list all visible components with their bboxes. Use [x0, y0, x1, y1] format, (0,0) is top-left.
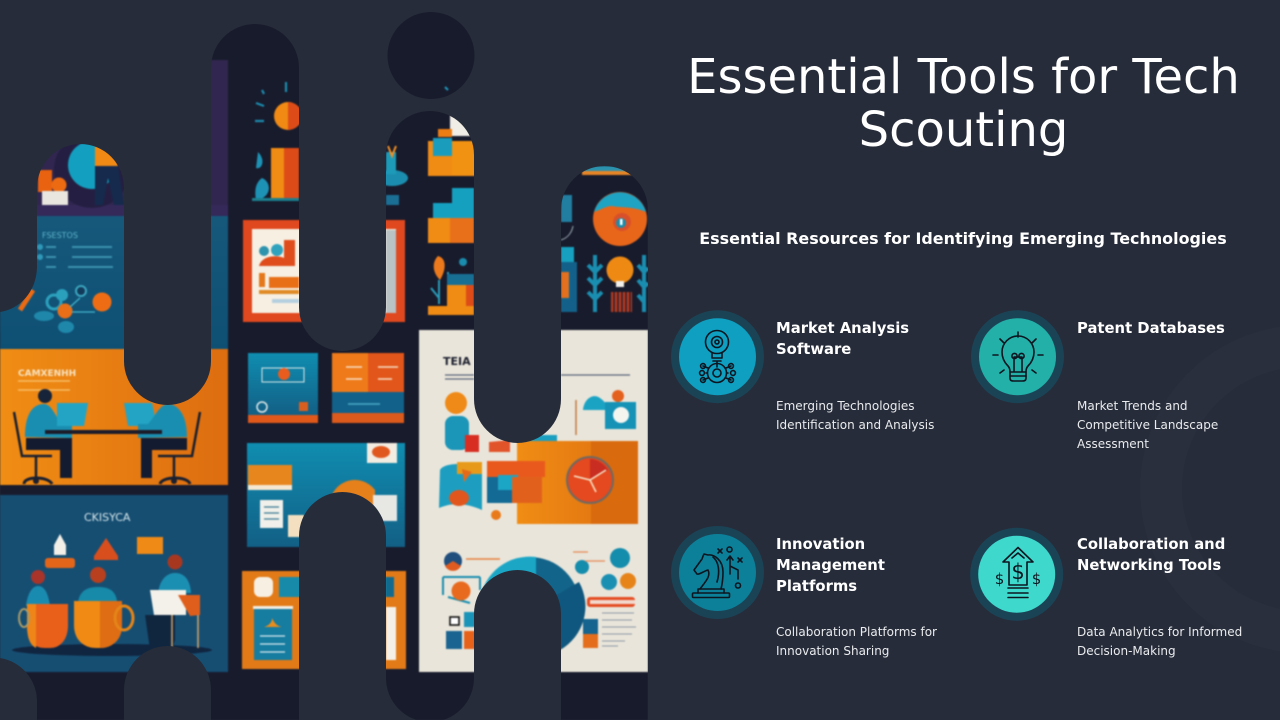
- card: collaboration and networking tools: [970, 528, 1242, 658]
- panel: orange laptop meeting: [0, 349, 228, 485]
- heading: Networking Tools: [1077, 557, 1221, 574]
- decorative ring: [1161, 346, 1280, 632]
- heading: Innovation: [776, 536, 865, 553]
- card: patent databases: [971, 310, 1225, 451]
- icon: dollar arrow: [970, 528, 1063, 621]
- panel: blue network scene: FSESTOS: [42, 231, 78, 240]
- title: [687, 49, 1240, 158]
- description: Decision-Making: [1077, 644, 1176, 658]
- card: innovation management platforms: [671, 526, 937, 658]
- icon: dollar arrow: $: [1032, 570, 1041, 588]
- icon: dollar arrow: $: [995, 570, 1004, 588]
- description: Emerging Technologies: [776, 399, 914, 413]
- panel: cream infographic poster: TEIA: [443, 355, 471, 368]
- heading: Market Analysis: [776, 320, 909, 337]
- icon: chess knight strategy: [671, 526, 764, 619]
- subtitle: Essential Resources for Identifying Emerging Technologies: [699, 229, 1227, 248]
- panel: orange laptop meeting: CAMXENHH: [18, 369, 76, 379]
- card: market analysis software: [671, 310, 934, 432]
- description: Innovation Sharing: [776, 644, 889, 658]
- panel: blue network scene: [0, 216, 228, 349]
- icon: dollar arrow: $: [1011, 560, 1025, 584]
- panel: orange report card: [242, 571, 406, 669]
- collage image in rounded columns: [0, 0, 648, 720]
- description: Market Trends and: [1077, 399, 1188, 413]
- icon: light bulb: [971, 310, 1064, 403]
- title: Essential Tools for Tech: [687, 49, 1240, 105]
- heading: Collaboration and: [1077, 536, 1225, 553]
- illustration: upper centre icons: [243, 82, 405, 322]
- description: Competitive Landscape: [1077, 418, 1218, 432]
- description: Identification and Analysis: [776, 418, 934, 432]
- panel: purple scene top-left: [0, 60, 448, 216]
- panel: teal dashboard card: [247, 443, 405, 547]
- panel: small orange teal cards: [248, 353, 404, 423]
- heading: Patent Databases: [1077, 320, 1225, 337]
- description: Data Analytics for Informed: [1077, 625, 1242, 639]
- heading: Software: [776, 341, 851, 358]
- illustration: top centre stacks: [386, 116, 474, 316]
- illustration: top right icons: [561, 166, 648, 312]
- heading: Platforms: [776, 578, 857, 595]
- panel: blue coffee meeting: CKISYCA: [84, 511, 131, 524]
- icon: bulb with gear and circuit: [671, 310, 764, 403]
- title: Scouting: [859, 102, 1068, 158]
- panel: cream infographic poster: [419, 330, 648, 672]
- description: Collaboration Platforms for: [776, 625, 937, 639]
- panel: blue coffee meeting: [0, 495, 228, 672]
- description: Assessment: [1077, 437, 1149, 451]
- heading: Management: [776, 557, 885, 574]
